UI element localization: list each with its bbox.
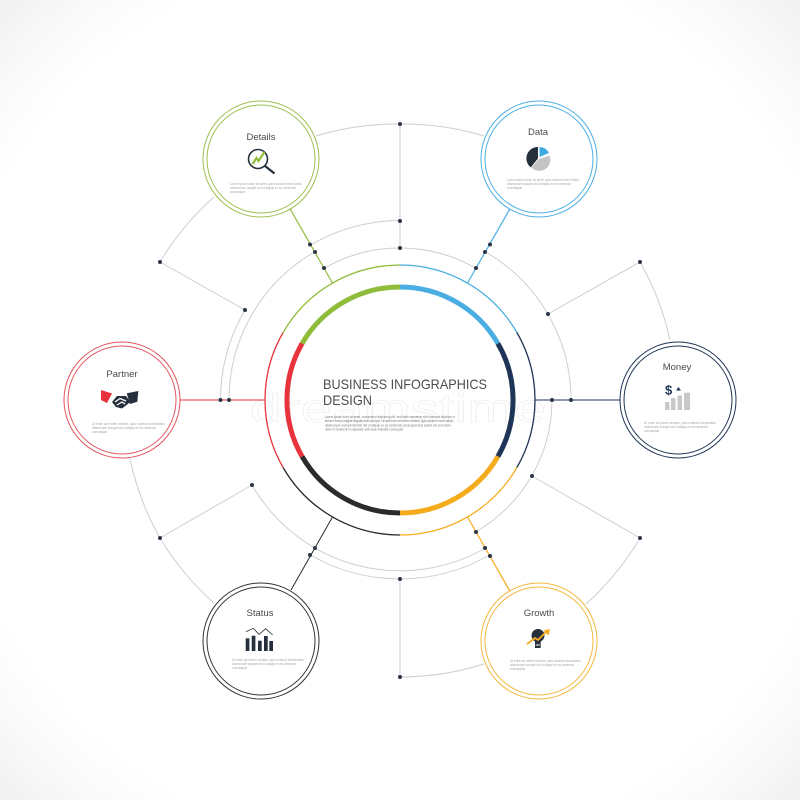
icon: money bars [665,382,690,410]
panel: partner [64,342,265,458]
text: growth: ullamcorper suscipit nisl ut aliquip ex ea commodo [510,663,574,667]
panel: details [203,101,332,283]
text: money: ullamcorper suscipit nisl ut aliquip ex ea commodo [644,425,708,429]
heading: growth: Growth [524,608,554,619]
text: money [644,421,716,433]
panel: growth [468,517,597,699]
panel: data [468,101,597,283]
thick segmented ring [287,287,513,513]
connector network: gray arcs and lines [130,124,670,677]
text: details: Lorem ipsum dolor sit amet, quis nostrud exerci tation [230,182,302,186]
title [323,376,487,408]
title: BUSINESS INFOGRAPHICS [323,376,487,392]
text: partner [92,422,165,434]
icon: money bars: $ [665,382,673,398]
heading: status: Status [247,608,274,619]
text: details [230,182,302,194]
center body text: Lorem ipsum dolor sit amet, consectetur adipiscing elit, sed diam nonummy nibh euismod tincidunt ut [325,414,456,419]
title: DESIGN [323,392,372,408]
text: growth [510,659,581,671]
text: money: Ut enim ad minim veniam, quis nostrud exercitation [644,421,716,425]
thin segmented ring [265,265,535,535]
center body text: ullamcorper suscipit lobortis nisl ut aliquip ex ea commodo consequat duis autem vel eum iriure [325,422,452,428]
center body text [325,414,456,432]
text: data: consequat [507,186,522,190]
text: partner: ullamcorper suscipit nisl ut aliquip ex ea commodo [92,426,156,430]
text: data: Lorem ipsum dolor sit amet, quis nostrud exerci tation [507,178,579,182]
text: status: Ut enim ad minim veniam, quis nostrud exercitation [232,658,304,662]
icon: magnifier with trend [248,150,274,174]
icon: light bulb with arrow [527,629,550,648]
text: status: ullamcorper suscipit nisl ut aliquip ex ea commodo [232,662,296,666]
center body text: dolor in hendrerit in vulputate velit esse molestie consequat [325,426,404,432]
text: details: consequat [230,190,245,194]
icon: pie chart [526,147,550,171]
center body text: laoreet dolore magna aliquam erat volutpat. Ut wisi enim ad minim veniam, quis nostrud exerci tation [325,418,453,423]
text: data: ullamcorper suscipit nisl ut aliquip ex ea commodo [507,182,571,186]
icon: handshake [101,390,138,408]
heading: money: Money [663,362,692,373]
panel: money [535,342,736,458]
heading: details: Details [246,132,276,143]
text: growth: consequat [510,667,525,671]
text: money: consequat [644,429,659,433]
text: details: ullamcorper suscipit nisl ut aliquip ex ea commodo [230,186,296,190]
text: partner: consequat [92,430,107,434]
text: status: consequat [232,666,247,670]
panel: status [203,517,332,699]
connector dots [158,122,642,679]
text: growth: Ut enim ad minim veniam, quis nostrud exercitation [510,659,581,663]
heading: partner: Partner [106,369,138,380]
text: data [507,178,579,190]
text: status [232,658,304,670]
text: partner: Ut enim ad minim veniam, quis nostrud exercitation [92,422,165,426]
heading: data: Data [528,127,549,138]
watermark: dreamstime [250,387,546,431]
icon: bar chart with line [246,628,273,651]
